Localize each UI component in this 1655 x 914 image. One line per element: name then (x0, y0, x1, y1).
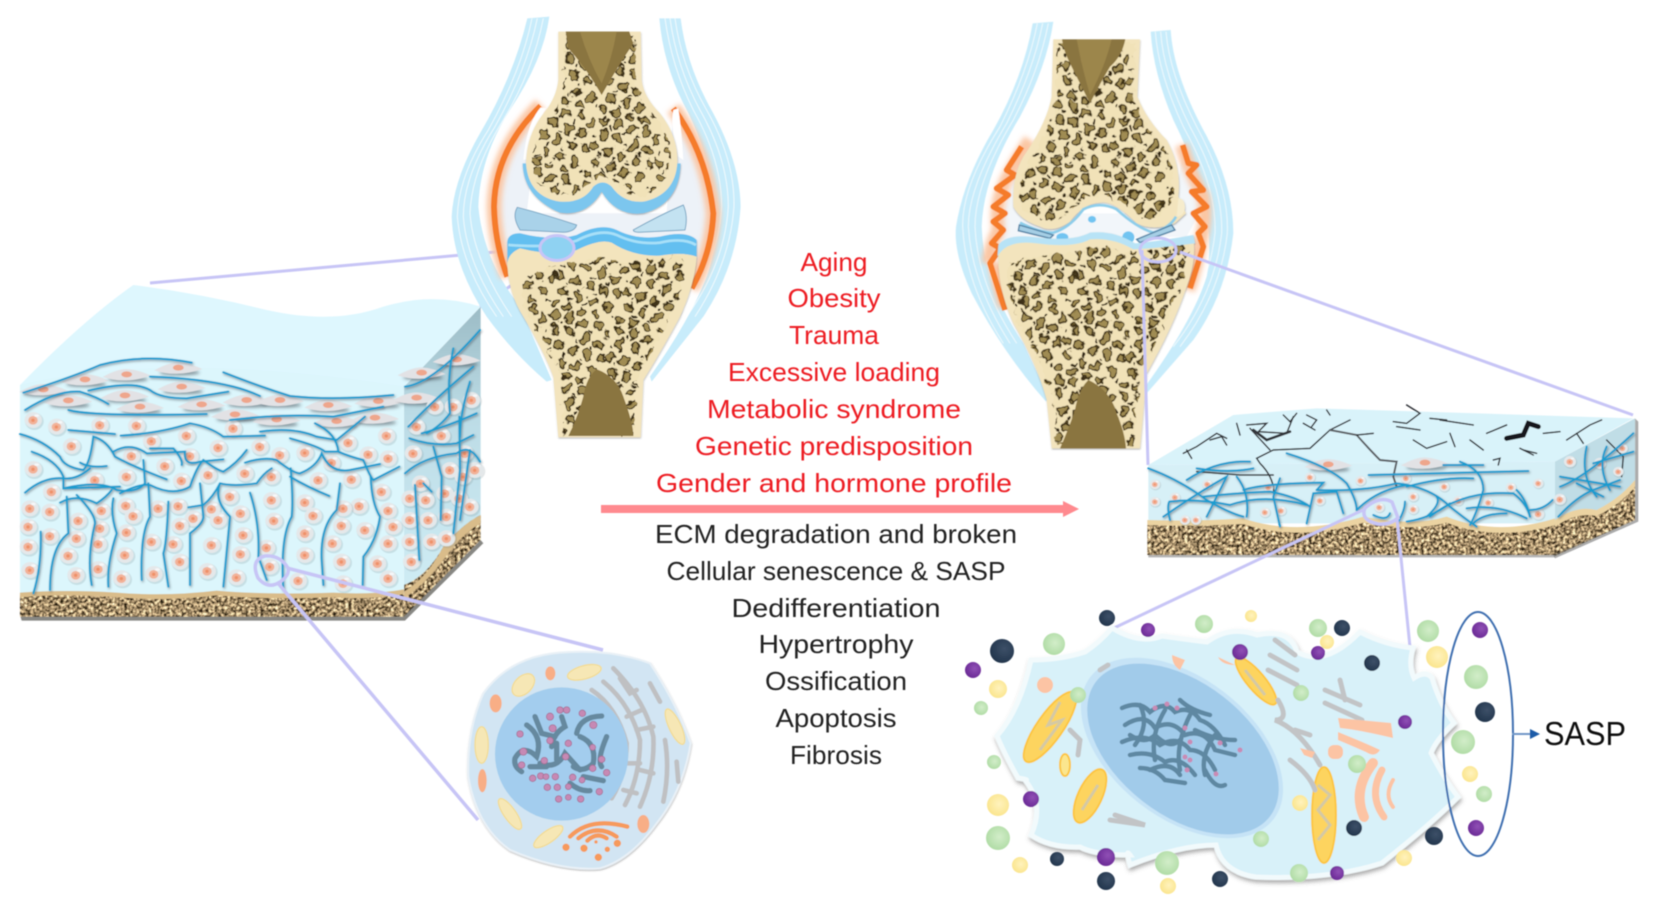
damaged cartilage and menisci (1018, 205, 1176, 243)
risk factors list: Obesity (788, 283, 880, 313)
block: side face (1553, 418, 1638, 558)
callout: damaged cartilage to senescent cell (1114, 500, 1413, 677)
risk factors list: Trauma (789, 320, 880, 350)
vesicles (562, 840, 621, 861)
endoplasmic orange cisternae (1037, 655, 1393, 817)
joint capsule with osteophyte inflammation (988, 140, 1207, 310)
nucleus (495, 687, 628, 821)
callout circle: left joint (540, 236, 574, 260)
pathological changes list: Cellular senescence & SASP (666, 556, 1006, 586)
risk factors list: Aging (800, 247, 868, 277)
callout: OA joint to damaged cartilage (1140, 238, 1633, 465)
normal knee joint (452, 17, 741, 437)
tibia: OA joint (997, 232, 1195, 448)
block: cracked top surface (1148, 408, 1633, 465)
cell body with spiky outline (997, 628, 1458, 877)
pathological changes list: Dedifferentiation (732, 593, 940, 623)
SASP grouping ellipse (1443, 612, 1513, 856)
normal cartilage block (19, 285, 485, 621)
golgi apparatus (570, 823, 627, 841)
mitochondria and lysosomes (475, 661, 689, 852)
tibia: normal joint (507, 227, 697, 437)
SASP secretory particles: purple (965, 622, 1488, 880)
pathological changes list: Fibrosis (790, 740, 882, 770)
label: SASP: SASP (1544, 715, 1626, 752)
mitochondria inner folds (1040, 670, 1330, 840)
pathological changes list: ECM degradation and broken (655, 519, 1017, 549)
femur: OA joint (1013, 39, 1186, 229)
SASP secretory particles: dark navy (990, 610, 1495, 890)
senescent cell (965, 610, 1495, 894)
arrow to SASP label (1512, 729, 1540, 739)
block: front face (1147, 462, 1555, 556)
risk factors list (656, 247, 1012, 498)
SASP secretory particles: yellow (987, 610, 1478, 894)
pathological changes list (655, 519, 1017, 770)
block: front face (20, 368, 404, 617)
risk factors list: Genetic predisposition (695, 431, 973, 461)
collagen fibres (20, 330, 480, 593)
broken collagen fibres (1148, 433, 1633, 527)
cell body (468, 652, 691, 869)
pathological changes list: Apoptosis (776, 703, 896, 733)
golgi stacks and ER (1070, 640, 1362, 825)
pathological changes list: Ossification (765, 666, 907, 696)
block: top surface (20, 285, 481, 387)
mitochondria (1015, 652, 1336, 863)
cracks in the surface (1183, 405, 1623, 500)
chondrocytes: damaged block (1150, 444, 1629, 526)
risk factors list: Excessive loading (728, 357, 940, 387)
ligaments: OA joint (956, 22, 1233, 402)
round chondrocytes (20, 392, 485, 593)
osteoarthritic knee joint (956, 22, 1233, 448)
SASP secretory particles: green (974, 615, 1492, 882)
nucleus (1047, 621, 1317, 875)
superficial flattened cells (19, 354, 481, 429)
block: side face and base (20, 307, 483, 621)
normal chondrocyte (468, 652, 691, 869)
menisci: normal joint (515, 205, 686, 232)
chromatin (1122, 700, 1235, 786)
endoplasmic reticulum (592, 668, 678, 807)
joint capsule: normal joint (494, 105, 713, 288)
callout line: left joint to left cartilage block (150, 248, 548, 307)
risk factors list: Metabolic syndrome (707, 394, 961, 424)
pathological changes list: Hypertrophy (758, 629, 914, 659)
ligaments: normal joint (452, 17, 741, 382)
risk factors list: Gender and hormone profile (656, 468, 1012, 498)
callout: normal cartilage to normal chondrocyte (255, 556, 603, 820)
damaged cartilage block (1147, 405, 1638, 558)
progression arrow (601, 501, 1079, 517)
femur: normal joint (523, 32, 681, 214)
